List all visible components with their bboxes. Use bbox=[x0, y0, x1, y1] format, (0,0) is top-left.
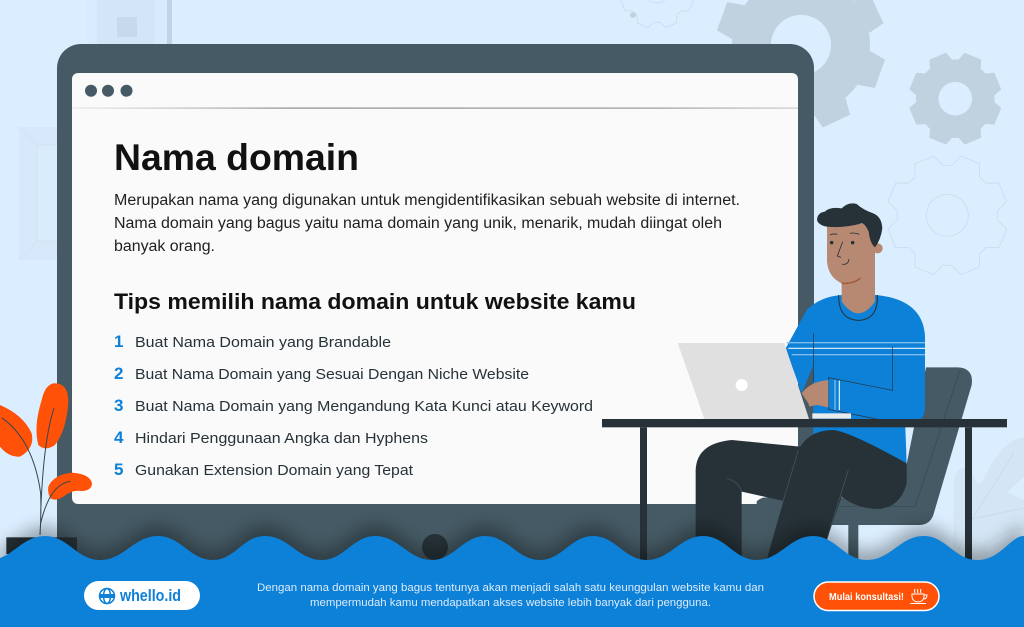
tip 3: 3 bbox=[114, 396, 123, 415]
tip 2: Buat Nama Domain yang Sesuai Dengan Niche Website bbox=[135, 367, 529, 383]
hair bbox=[817, 203, 882, 247]
tips heading: Tips memilih nama domain untuk website kamu bbox=[114, 289, 636, 314]
browser window bbox=[72, 73, 798, 504]
decor: window top left bbox=[87, 0, 172, 46]
tip 1: 1 bbox=[114, 332, 123, 351]
tip 4: Hindari Penggunaan Angka dan Hyphens bbox=[135, 431, 428, 447]
tip 4: 4 bbox=[114, 428, 124, 447]
icon: medium gear bbox=[895, 39, 1015, 159]
footer message: Dengan nama domain yang bagus tentunya akan menjadi salah satu keunggulan website kamu dan bbox=[257, 582, 764, 594]
tip 3: Buat Nama Domain yang Mengandung Kata Kunci atau Keyword bbox=[135, 399, 593, 415]
footer message bbox=[257, 582, 764, 609]
ear bbox=[873, 243, 883, 253]
tips list bbox=[114, 332, 593, 479]
sweater bbox=[786, 295, 925, 463]
title: Nama domain bbox=[114, 137, 359, 178]
logo wordmark: whello.id bbox=[119, 587, 181, 605]
icon: coffee cup bbox=[910, 589, 927, 604]
intro paragraph: Merupakan nama yang digunakan untuk mengidentifikasikan sebuah website di internet. bbox=[114, 192, 740, 209]
footer wave bbox=[0, 536, 1024, 627]
chair back edge bbox=[840, 370, 960, 507]
front leg bbox=[767, 430, 907, 560]
wave shadow bbox=[0, 526, 1024, 617]
intro paragraph: Nama domain yang bagus yaitu nama domain yang unik, menarik, mudah diingat oleh bbox=[114, 215, 722, 232]
back leg bbox=[696, 440, 800, 560]
logo pill bbox=[84, 581, 200, 610]
leg fold lines bbox=[727, 450, 848, 557]
face details bbox=[830, 233, 859, 264]
laptop bbox=[678, 343, 851, 419]
tip 5: 5 bbox=[114, 460, 123, 479]
chair bbox=[757, 367, 972, 560]
sweater white stripe bbox=[788, 348, 925, 410]
plant bbox=[0, 383, 92, 554]
intro paragraph bbox=[114, 192, 740, 255]
icon: outline gear bbox=[869, 137, 1024, 294]
neck and face bbox=[827, 223, 875, 313]
monitor bbox=[57, 44, 814, 584]
person at desk bbox=[602, 203, 1007, 561]
decor: gear dot bbox=[630, 12, 636, 18]
icon: small outline gear top bbox=[609, 0, 705, 39]
sweater stripes bbox=[787, 343, 925, 410]
hand bbox=[802, 380, 828, 407]
beard line bbox=[842, 278, 861, 283]
monitor camera bbox=[422, 534, 448, 560]
tip 2: 2 bbox=[114, 364, 123, 383]
tip 5: Gunakan Extension Domain yang Tepat bbox=[135, 463, 413, 479]
sweater fold lines bbox=[813, 333, 893, 419]
tip 1: Buat Nama Domain yang Brandable bbox=[135, 335, 391, 351]
intro paragraph: banyak orang. bbox=[114, 238, 215, 255]
desk bbox=[602, 419, 1007, 561]
icon: www globe bbox=[100, 588, 114, 604]
icon: large gear bbox=[693, 0, 909, 153]
cta button bbox=[814, 582, 939, 610]
cta button: Mulai konsultasi! bbox=[829, 591, 904, 603]
collar bbox=[839, 295, 877, 320]
decor: pale leaf bottom right bbox=[953, 437, 1024, 560]
footer message: mempermudah kamu mendapatkan akses website lebih banyak dari pengguna. bbox=[310, 597, 711, 609]
decor: frame left bbox=[19, 127, 59, 260]
